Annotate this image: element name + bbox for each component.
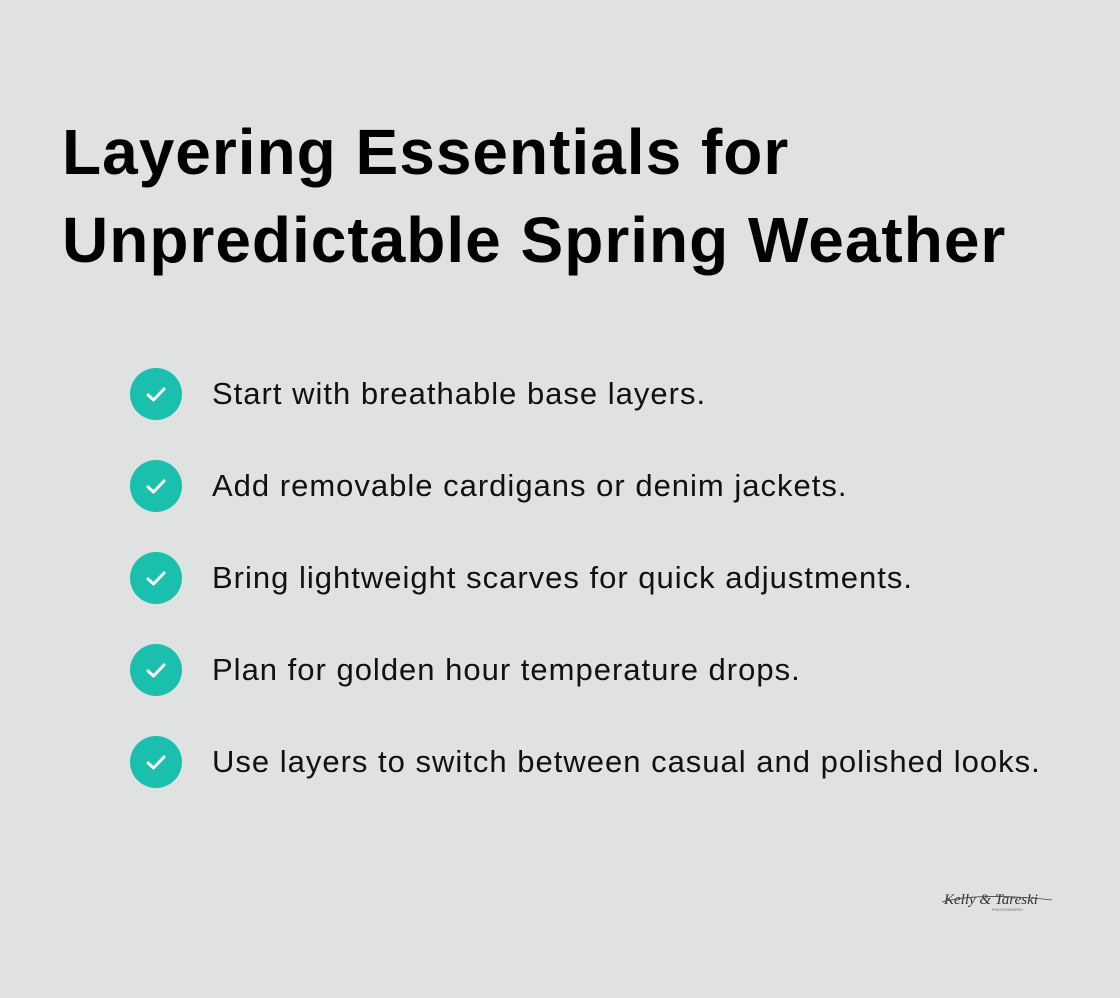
icon: check (130, 644, 182, 696)
text: Bring lightweight scarves for quick adjustments. (212, 560, 913, 595)
title: Layering Essentials for (62, 116, 789, 188)
logo (942, 892, 1052, 912)
icon: check (130, 460, 182, 512)
item 5 (130, 736, 1041, 788)
item 4 (130, 644, 801, 696)
icon: check (130, 736, 182, 788)
item 3 (130, 552, 913, 604)
logo: PHOTOGRAPHY (992, 907, 1023, 912)
icon: check (130, 552, 182, 604)
text: Use layers to switch between casual and polished looks. (212, 744, 1041, 779)
title (62, 116, 1006, 276)
title: Unpredictable Spring Weather (62, 204, 1006, 276)
text: Add removable cardigans or denim jackets. (212, 468, 847, 503)
text: Start with breathable base layers. (212, 376, 706, 411)
logo: Kelly & Tareski (943, 892, 1038, 908)
text: Plan for golden hour temperature drops. (212, 652, 801, 687)
item 1 (130, 368, 706, 420)
icon: check (130, 368, 182, 420)
item 2 (130, 460, 847, 512)
